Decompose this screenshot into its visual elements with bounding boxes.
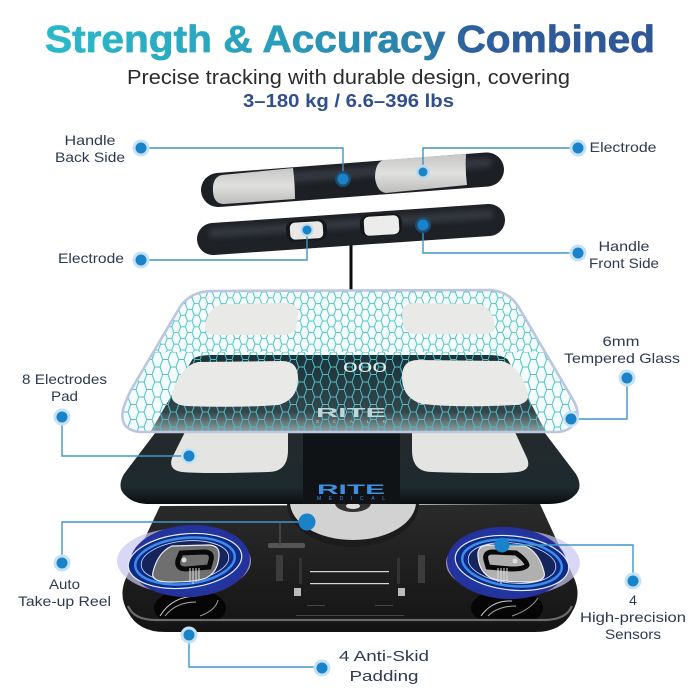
- callout: take-up reel: Take-up Reel: [18, 593, 111, 609]
- back electrode right: [375, 154, 467, 193]
- logo: [317, 481, 385, 502]
- front electrode right: [359, 213, 403, 237]
- logo: MEDICAL: [317, 496, 385, 502]
- tempered glass layer: [121, 288, 579, 434]
- electrode pad right: [412, 430, 528, 473]
- callout: anti-skid padding: Padding: [350, 668, 418, 685]
- pad top right: [402, 303, 495, 334]
- callout: handle front side: Handle: [598, 238, 650, 254]
- callout: electrode top right: Electrode: [590, 139, 657, 155]
- callout: sensors: Sensors: [605, 626, 661, 642]
- callout: handle front side: Front Side: [589, 255, 659, 271]
- center display strip: [303, 425, 400, 504]
- logo: RITE: [317, 481, 385, 497]
- pad mid left: [172, 361, 298, 407]
- callout: electrode left: [58, 224, 314, 268]
- take-up reel: [287, 504, 419, 540]
- callout: take-up reel: [18, 514, 316, 609]
- callout: electrode left: Electrode: [58, 250, 124, 266]
- sensor right: [445, 524, 580, 602]
- handle back side: [213, 154, 487, 204]
- glass logo: [316, 405, 387, 424]
- subtitle: Precise tracking with durable design, covering: [127, 67, 570, 89]
- glass logo: SCALE: [316, 419, 386, 424]
- callout: sensors: [494, 538, 686, 642]
- callout: electrodes pad: 8 Electrodes: [22, 371, 107, 387]
- scale bottom housing: [122, 504, 578, 632]
- weight range: 3–180 kg / 6.6–396 lbs: [243, 91, 454, 111]
- glass logo: RITE: [316, 405, 387, 420]
- cable: [350, 245, 352, 355]
- callout: sensors: High-precision: [580, 609, 686, 625]
- pad mid right: [402, 360, 528, 406]
- callout: sensors: 4: [629, 592, 637, 608]
- back electrode left: [213, 168, 295, 204]
- callout: handle front side: [415, 217, 659, 271]
- digital readout: 000: [343, 359, 387, 375]
- callout: electrodes pad: Pad: [51, 388, 78, 404]
- center hardware: [268, 523, 425, 616]
- callout: handle back side: Handle: [64, 132, 116, 148]
- callout: electrodes pad: [22, 371, 197, 464]
- callout: tempered glass: 6mm: [602, 333, 640, 349]
- electrode pad left: [171, 430, 288, 473]
- title: Strength & Accuracy Combined: [45, 19, 655, 61]
- pad top left: [205, 303, 298, 335]
- callout: handle back side: Back Side: [55, 149, 125, 165]
- callout: anti-skid padding: [180, 626, 429, 685]
- callout: tempered glass: [563, 333, 680, 427]
- sensor left: [117, 522, 252, 600]
- glass edge: [122, 290, 578, 432]
- callout: tempered glass: Tempered Glass: [564, 350, 680, 366]
- callout: electrode top right: [416, 139, 657, 179]
- front electrode left: [285, 219, 328, 242]
- housing rim: [128, 606, 572, 620]
- callout: take-up reel: Auto: [49, 576, 80, 592]
- callout: handle back side: [55, 132, 351, 187]
- anti-skid foot left: [154, 594, 226, 619]
- callout: anti-skid padding: 4 Anti-Skid: [339, 648, 429, 665]
- scale black middle layer: [120, 420, 580, 504]
- anti-skid foot right: [471, 595, 543, 619]
- dark window: [148, 355, 548, 436]
- handle front side: [213, 213, 489, 242]
